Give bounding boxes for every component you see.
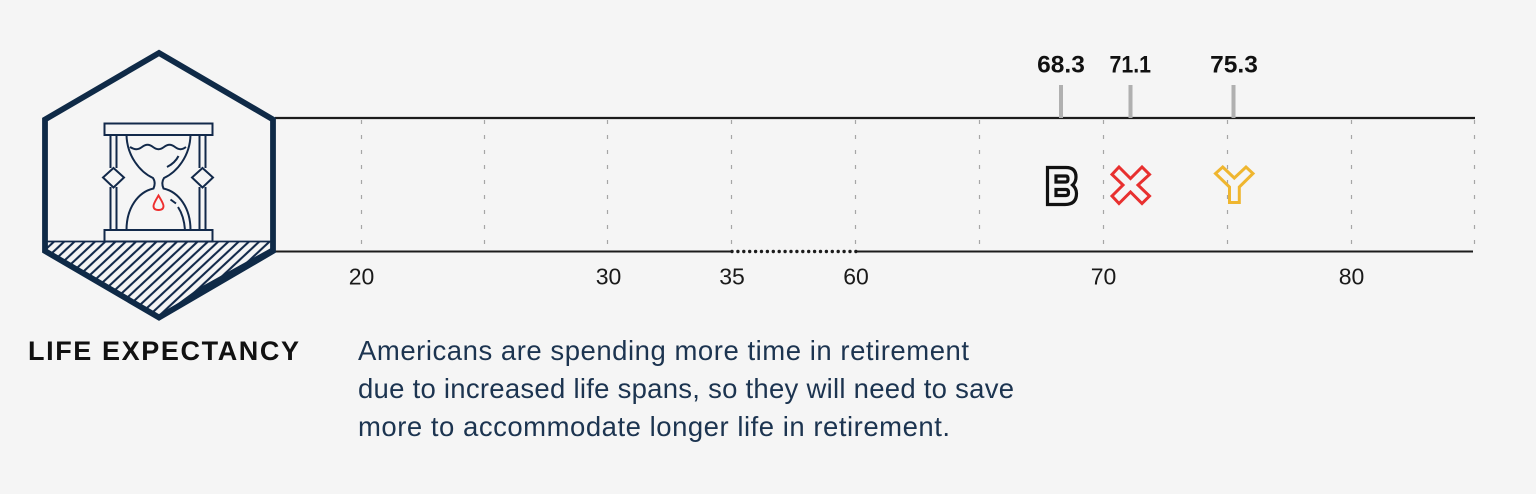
axis labels [349, 264, 1364, 290]
wedge on lower right [159, 248, 272, 317]
description text: due to increased life spans, so they will need to save [358, 373, 1014, 404]
description text: more to accommodate longer life in retirement. [358, 411, 950, 442]
heading: LIFE EXPECTANCY [28, 336, 299, 366]
hexagon outline [45, 53, 273, 318]
icon: generation X [1112, 167, 1150, 204]
red drop [154, 196, 164, 210]
icon: hexagon with hourglass [44, 53, 276, 321]
marker: 75.3 [1210, 52, 1258, 118]
timeline band [275, 118, 1475, 252]
hourglass [103, 124, 213, 242]
icon: boomers B [1048, 168, 1076, 204]
axis labels: 30 [596, 264, 621, 290]
description text [358, 335, 1014, 442]
marker: 75.3: 75.3 [1210, 52, 1258, 78]
axis labels: 70 [1091, 264, 1116, 290]
axis labels: 60 [843, 264, 869, 290]
marker: 68.3 [1037, 52, 1085, 118]
marker: 71.1 [1110, 52, 1151, 118]
axis labels: 80 [1339, 264, 1364, 290]
icon: generation Y [1216, 167, 1253, 202]
axis labels: 35 [719, 264, 745, 290]
marker: 71.1: 71.1 [1110, 52, 1151, 78]
life expectancy infographic [30, 50, 1476, 442]
hatched floor [48, 242, 270, 314]
marker: 68.3: 68.3 [1037, 52, 1085, 78]
description text: Americans are spending more time in retirement [358, 335, 969, 366]
axis labels: 20 [349, 264, 374, 290]
